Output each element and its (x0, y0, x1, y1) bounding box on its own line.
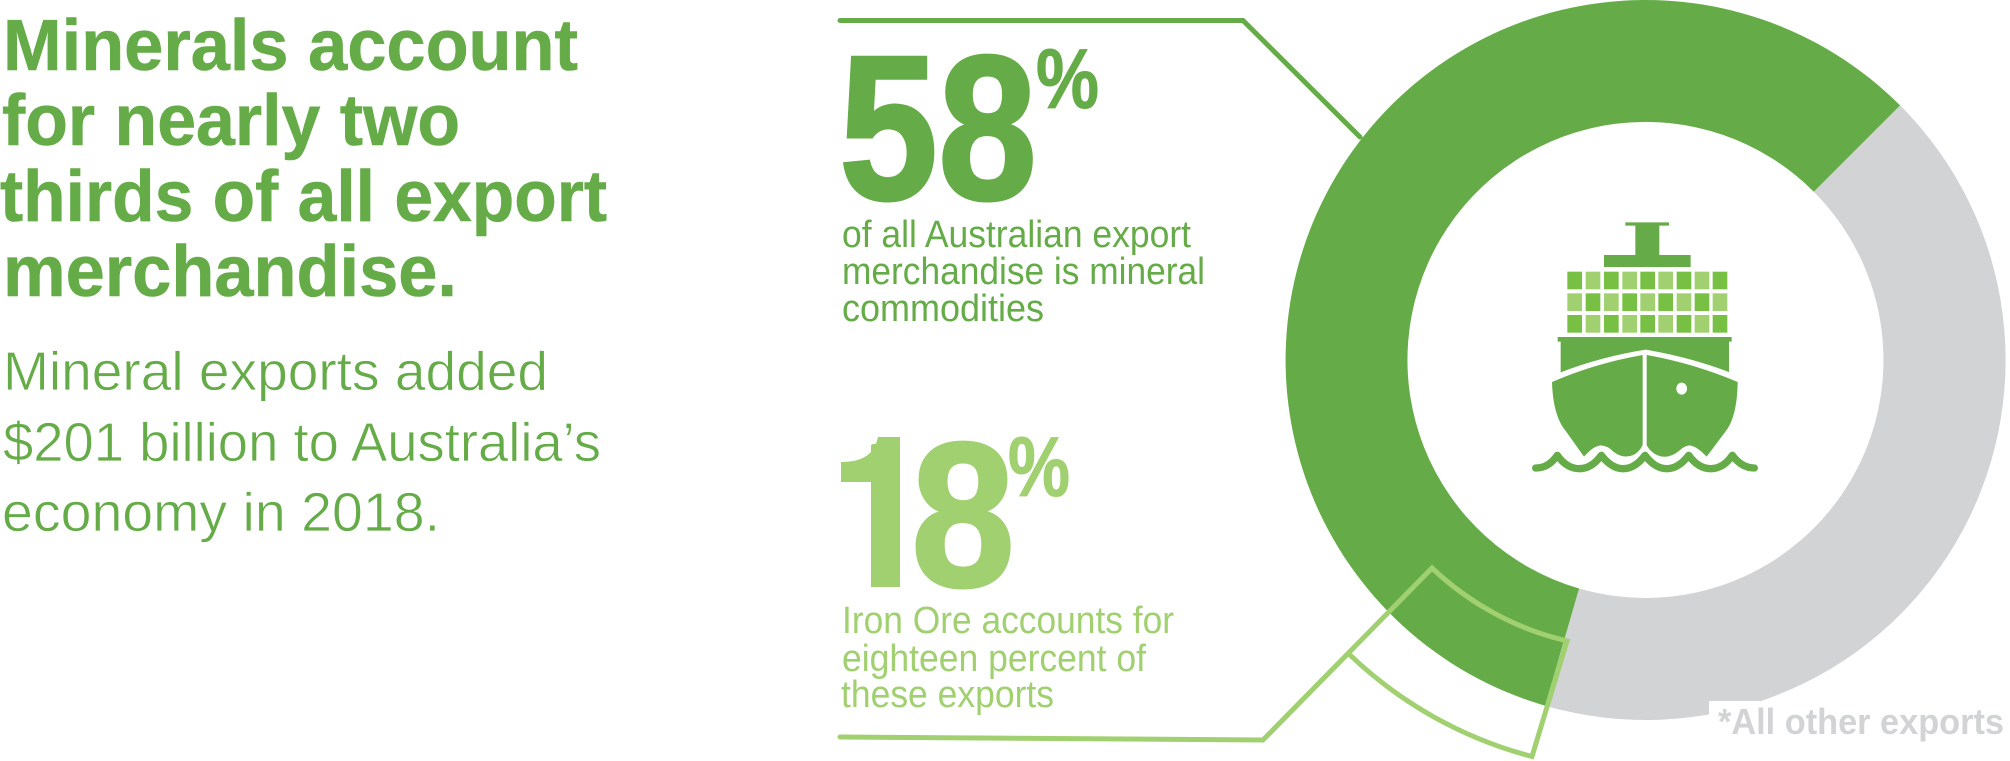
caption: 58 percent: of all Australian export (842, 214, 1191, 256)
caption: 18 percent: eighteen percent of (842, 638, 1146, 680)
stat: 58 percent: % (1036, 32, 1099, 126)
caption: 18 percent: these exports (841, 674, 1054, 716)
title: thirds of all export (0, 157, 607, 237)
caption: 18 percent: Iron Ore accounts for (842, 600, 1174, 642)
intro text: $201 billion to Australia’s (3, 411, 601, 473)
stat: 18 percent: % (1008, 420, 1070, 514)
title: for nearly two (2, 81, 460, 161)
title: merchandise. (3, 232, 457, 312)
ship mast and bridge (1604, 222, 1691, 267)
ship hull (1552, 355, 1738, 457)
title: Minerals account (3, 6, 578, 86)
ship containers (1567, 272, 1727, 333)
intro text: Mineral exports added (3, 340, 548, 402)
caption: 58 percent (842, 214, 1205, 330)
intro text (2, 340, 601, 543)
donut segment: all other exports (1545, 105, 2006, 720)
intro text: economy in 2018. (2, 481, 440, 543)
icon: container ship (1536, 222, 1754, 469)
ship deck (1558, 337, 1732, 372)
stat: 58 percent: 58 (839, 13, 1037, 243)
stat: 18 percent: 8 (911, 400, 1015, 630)
legend note: all other exports: *All other exports (1718, 701, 2004, 742)
ship waves (1536, 455, 1754, 469)
caption: 58 percent: commodities (842, 288, 1044, 330)
caption: 18 percent (841, 600, 1174, 716)
stat: 18 percent (820, 400, 1070, 632)
donut segment: minerals 58 percent (1286, 0, 1900, 706)
legend note: all other exports (1709, 701, 2010, 761)
caption: 58 percent: merchandise is mineral (842, 251, 1205, 293)
title (0, 6, 607, 312)
leader and outline: 18 percent iron ore (840, 568, 1567, 756)
stat: 18 percent: 1 (823, 400, 939, 632)
leader line: 58 percent (840, 20, 1360, 137)
